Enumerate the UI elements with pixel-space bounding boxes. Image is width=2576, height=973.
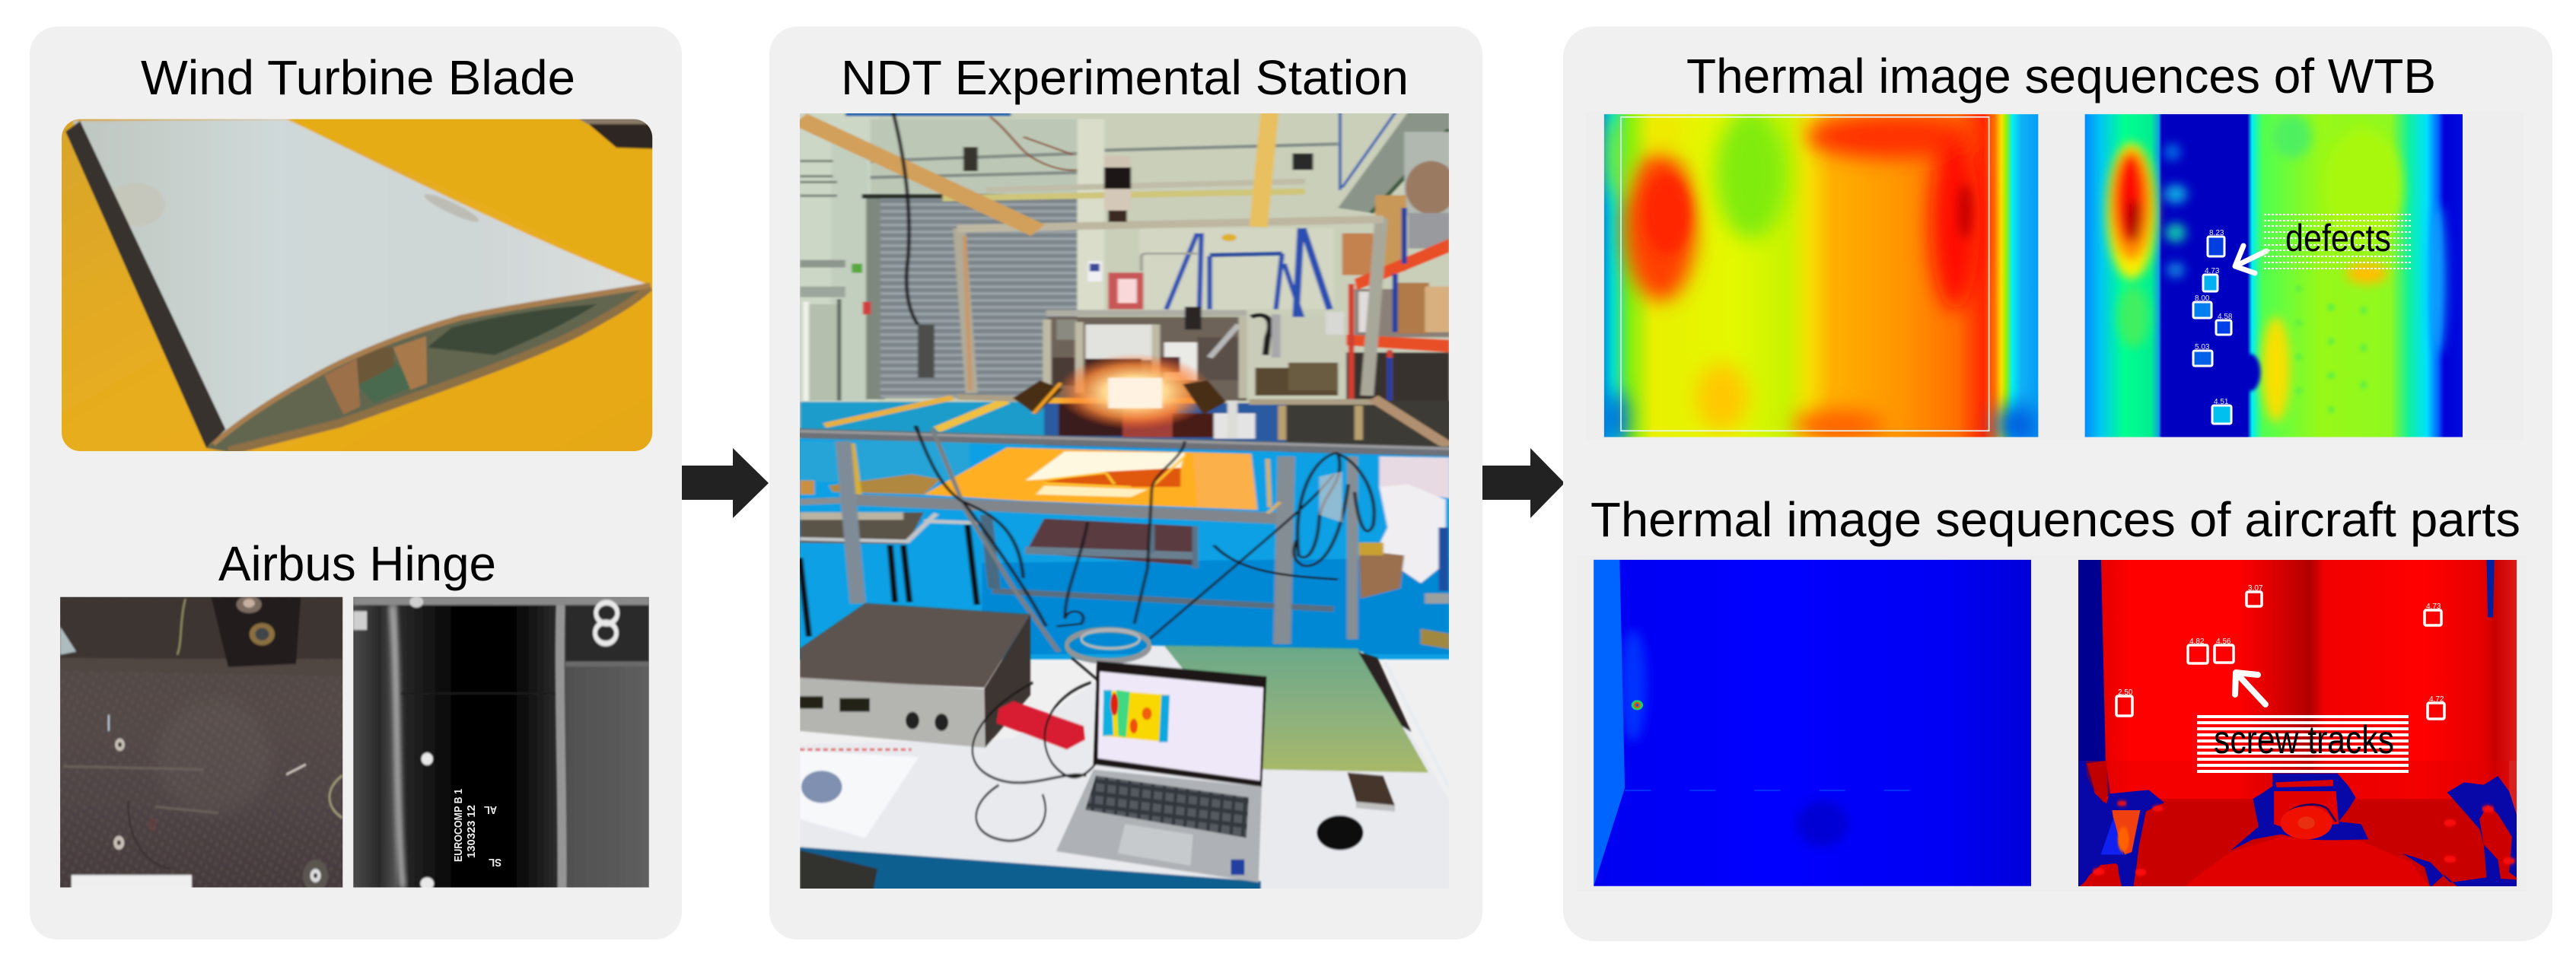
arrow: station to thermal sequences: [1482, 448, 1565, 518]
arrow: samples to station: [682, 448, 769, 518]
thermal image: aircraft part raw frame: [1593, 558, 2033, 887]
thermal image: WTB raw frame: [1599, 109, 2046, 447]
screw markers: 4.73: [2426, 603, 2441, 611]
screw markers: 4.72: [2429, 695, 2444, 704]
screw markers: 4.56: [2216, 638, 2231, 646]
x-ray markings: SL: [489, 856, 502, 869]
photo: experimental station: [791, 109, 1458, 894]
photo: airbus hinge surface: B: [147, 816, 159, 835]
x-ray markings: AL: [484, 803, 497, 816]
panel: thermal image sequences: [1563, 27, 2552, 941]
photo: airbus hinge x-ray: [352, 594, 651, 891]
defect markers: 8.23: [2209, 229, 2224, 237]
defect markers: 4.51: [2214, 398, 2229, 406]
callout band: defects: [2264, 215, 2411, 269]
photo: airbus hinge surface: [59, 594, 345, 892]
thermal image: aircraft part processed frame with screw tracks: [2078, 560, 2520, 888]
heading: Thermal image sequences of aircraft parts: Thermal image sequences of aircraft parts: [1590, 492, 2520, 547]
panel: NDT experimental station: [769, 27, 1482, 940]
heading: NDT Experimental Station: NDT Experimental Station: [841, 50, 1409, 105]
photo: wind turbine blade section: [59, 115, 655, 456]
screw markers: 3.07: [2248, 584, 2263, 593]
panel: wind turbine blade and airbus hinge: [30, 27, 682, 940]
defect markers: 4.73: [2205, 267, 2220, 275]
x-ray markings: [452, 789, 502, 869]
defect markers: 8.00: [2195, 294, 2210, 303]
screw markers: 4.82: [2189, 638, 2205, 646]
screw markers: [2116, 584, 2444, 719]
callout band: defects: defects: [2285, 217, 2391, 259]
heading: Wind Turbine Blade: Wind Turbine Blade: [141, 50, 575, 105]
screw markers: 2.50: [2118, 688, 2133, 697]
callout band: screw tracks: screw tracks: [2214, 718, 2394, 762]
callout band: screw tracks: [2197, 717, 2409, 771]
defect markers: [2193, 229, 2233, 424]
defect markers: 4.58: [2218, 313, 2233, 321]
heading: Thermal image sequences of WTB: Thermal image sequences of WTB: [1686, 49, 2436, 103]
x-ray markings: EUROCOMP B 1: [452, 789, 465, 862]
arrow: defects pointer: [2235, 246, 2266, 273]
x-ray markings: 130323 12: [465, 805, 478, 858]
arrow: screw tracks pointer: [2235, 673, 2266, 704]
heading: Airbus Hinge: Airbus Hinge: [218, 536, 496, 591]
thermal image: WTB processed frame with defects: [2081, 112, 2467, 440]
defect markers: 5.03: [2195, 343, 2210, 351]
